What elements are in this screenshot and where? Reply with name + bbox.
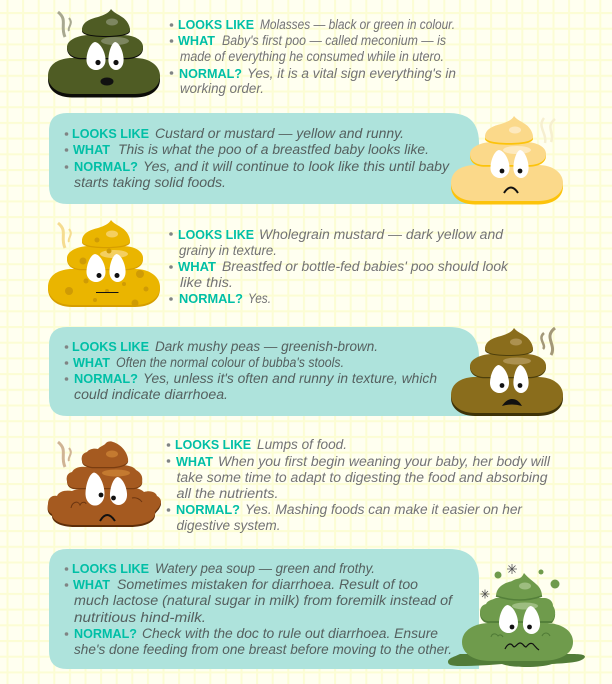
text block: pea soup: Watery pea soup — green and frothy. — [155, 561, 375, 576]
text block: wholegrain mustard: Yes. — [248, 291, 271, 306]
text block: lumps of food: When you first begin weaning your baby, her body will — [218, 454, 551, 469]
text block: pea soup: nutritious hind-milk. — [74, 610, 206, 625]
icon: frothy green poo — [448, 564, 585, 667]
text block: lumps of food: LOOKS LIKE — [175, 437, 251, 452]
text block: molasses — [170, 17, 456, 96]
text block: custard: Custard or mustard — yellow and runny. — [155, 126, 404, 141]
text block: mushy peas: Often the normal colour of bubba's stools. — [116, 355, 344, 370]
text block: pea soup: Check with the doc to rule out diarrhoea. Ensure — [142, 626, 438, 641]
text block: lumps of food: Lumps of food. — [257, 437, 347, 452]
text block: custard — [65, 126, 450, 190]
text block: mushy peas: Yes, unless it's often and runny in texture, which — [143, 371, 437, 386]
icon: greenish-brown poo — [451, 328, 563, 416]
text block: molasses: made of everything he consumed while in utero. — [180, 49, 444, 64]
text block: custard: This is what the poo of a breastfed baby looks like. — [118, 142, 429, 157]
text block: wholegrain mustard: Wholegrain mustard — dark yellow and — [259, 227, 504, 242]
text block: wholegrain mustard: LOOKS LIKE — [178, 227, 254, 242]
text block: pea soup: NORMAL? — [74, 626, 137, 641]
text block: lumps of food: all the nutrients. — [176, 486, 278, 501]
text block: custard: Yes, and it will continue to look like this until baby — [143, 159, 450, 174]
icon: custard yellow poo — [451, 116, 563, 204]
text block: pea soup — [65, 561, 453, 657]
text block: custard: LOOKS LIKE — [72, 126, 149, 141]
icon: lumpy brown poo — [48, 441, 161, 527]
text block: molasses: NORMAL? — [179, 66, 242, 81]
text block: molasses: WHAT — [178, 33, 215, 48]
text block: pea soup: much lactose (natural sugar in milk) from foremilk instead of — [74, 593, 453, 608]
text block: wholegrain mustard — [169, 227, 509, 306]
text block: mushy peas: LOOKS LIKE — [72, 339, 149, 354]
text block: lumps of food: Yes. Mashing foods can make it easier on her — [245, 502, 523, 517]
text block: pea soup: WHAT — [73, 577, 110, 592]
text block: molasses: Baby's first poo — called meconium — is — [222, 33, 446, 48]
panel: pea soup poo background — [49, 549, 479, 669]
text block: molasses: working order. — [180, 81, 264, 96]
icon: molasses black-green poo — [48, 9, 160, 98]
text block: lumps of food — [167, 437, 551, 533]
text block: wholegrain mustard: Breastfed or bottle-fed babies' poo should look — [222, 259, 509, 274]
text block: molasses: LOOKS LIKE — [178, 17, 254, 32]
text block: pea soup: Sometimes mistaken for diarrhoea. Result of too — [117, 577, 419, 592]
text block: pea soup: she's done feeding from one breast before moving to the other. — [74, 642, 452, 657]
text block: wholegrain mustard: NORMAL? — [179, 291, 243, 306]
text block: mushy peas: WHAT — [73, 355, 110, 370]
text block: lumps of food: WHAT — [176, 454, 213, 469]
text block: lumps of food: NORMAL? — [176, 502, 240, 517]
text block: lumps of food: take some time to adapt to digesting the food and absorbing — [176, 470, 548, 485]
text block: molasses: Yes, it is a vital sign everything's in — [247, 66, 456, 81]
text block: wholegrain mustard: grainy in texture. — [179, 243, 277, 258]
text block: lumps of food: digestive system. — [176, 518, 280, 533]
panel: mushy peas poo background — [49, 327, 479, 416]
text block: custard: WHAT — [73, 142, 110, 157]
text block: wholegrain mustard: WHAT — [178, 259, 216, 274]
text block: molasses: Molasses — black or green in colour. — [260, 17, 455, 32]
text block: custard: starts taking solid foods. — [74, 175, 226, 190]
text block: mushy peas: could indicate diarrhoea. — [74, 387, 228, 402]
text block: mushy peas: Dark mushy peas — greenish-brown. — [155, 339, 378, 354]
text block: wholegrain mustard: like this. — [180, 275, 233, 290]
text block: pea soup: LOOKS LIKE — [72, 561, 149, 576]
icon: wholegrain mustard poo — [48, 220, 160, 307]
text block: custard: NORMAL? — [74, 159, 138, 174]
text block: mushy peas: NORMAL? — [74, 371, 138, 386]
text block: mushy peas — [65, 339, 437, 402]
panel: custard poo background — [49, 113, 479, 204]
